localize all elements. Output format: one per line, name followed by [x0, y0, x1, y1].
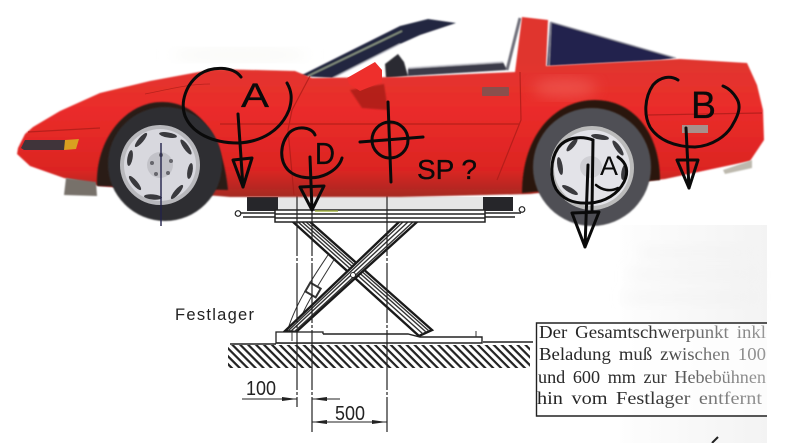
- text box: Gesamtschwerpunkt note: Der Gesamtschwerpunkt inkl: [539, 322, 766, 342]
- annotation D: circle and arrow: [282, 128, 342, 210]
- dimension 500: 500: [335, 403, 365, 425]
- car rear bumper trim: [723, 160, 752, 174]
- lift top platform: [235, 197, 525, 222]
- front wheel: [97, 102, 228, 226]
- dimension 500: [312, 403, 387, 425]
- icon: hydraulic cylinder: [288, 255, 335, 330]
- text box: Gesamtschwerpunkt note: [536, 322, 768, 416]
- dimension 100: [242, 378, 340, 401]
- car body lines: [28, 72, 762, 195]
- rear wheel: [522, 100, 660, 226]
- annotation B: circle and arrow: [646, 77, 739, 188]
- mark: bottom edge glyph: [712, 437, 718, 443]
- ground hatching: [228, 342, 533, 368]
- annotation A: circle and arrow: A: [241, 77, 269, 115]
- annotation SP: crosshair: SP ?: [417, 154, 477, 185]
- annotation D: circle and arrow: D: [315, 136, 335, 171]
- annotation A: circle and arrow: [183, 68, 291, 187]
- annotation SP: crosshair: [360, 102, 477, 185]
- car mirror: [347, 62, 388, 110]
- hand annotations: [183, 68, 739, 247]
- dimension 100: 100: [246, 378, 276, 400]
- car front indicator: [21, 139, 79, 150]
- annotation B: circle and arrow: B: [691, 85, 716, 127]
- car rear side marker: [682, 125, 708, 133]
- annotation rear wheel: circle and arrow: A: [600, 151, 618, 181]
- icon: scissor arm falling: [292, 221, 432, 336]
- annotation rear wheel: circle and arrow: [552, 138, 627, 247]
- label: Festlager: Festlager: [175, 306, 254, 324]
- car: [17, 17, 764, 226]
- car body: [17, 17, 764, 197]
- text box: Gesamtschwerpunkt note: und 600 mm zur Hebebühnen: [538, 367, 766, 387]
- dimension guide lines: [297, 196, 387, 432]
- scissor lift drawing: [175, 196, 533, 432]
- car front spoiler: [64, 178, 97, 196]
- text box: Gesamtschwerpunkt note: Beladung muß zwischen 100: [539, 344, 766, 364]
- background: paper tint: [170, 49, 767, 443]
- lift base: [276, 331, 482, 343]
- icon: scissor arm rising: [285, 221, 418, 332]
- car bright highlight: [533, 78, 597, 98]
- car windshield and interior: [300, 18, 676, 78]
- car door handle: [482, 87, 509, 96]
- text box: Gesamtschwerpunkt note: hin vom Festlager entfernt: [537, 388, 762, 408]
